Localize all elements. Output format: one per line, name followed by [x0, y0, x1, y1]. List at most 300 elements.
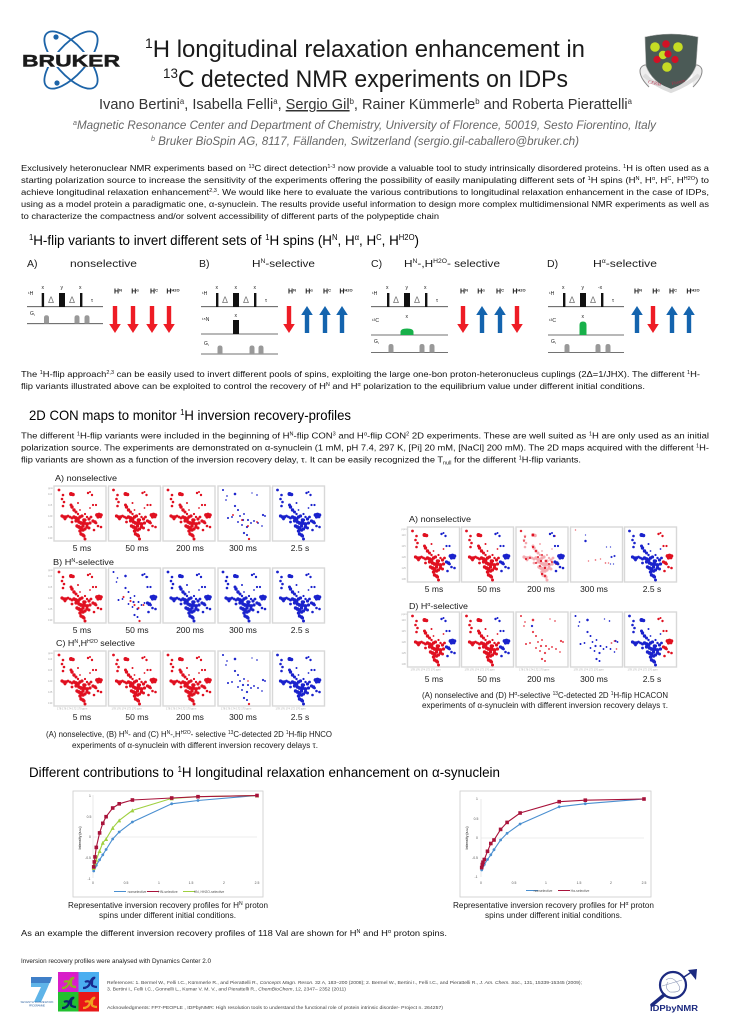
authors: , Isabella Felli — [184, 96, 273, 113]
caption: HCACON maps: (A) nonselective and (D) H — [422, 691, 516, 700]
panel: B HN-selective: H — [288, 288, 293, 296]
panel: C HN,HH2O-selective: H — [404, 258, 412, 270]
caption: HCACON maps: -selective — [517, 691, 553, 700]
heading: contributions: H longitudinal relaxation enhancement on α-synuclein — [182, 764, 500, 780]
panel: A nonselective — [27, 258, 180, 333]
row D Halpha-selective: 300 ms — [580, 674, 608, 684]
heading: 2D CON maps — [29, 407, 351, 423]
chart: Halpha recovery profiles: 1 — [545, 881, 547, 885]
panel: C HN,HH2O-selective — [371, 258, 526, 352]
heading: 1H-flip variants: H-flip variants to invert different sets of — [33, 232, 265, 248]
text block: 2D CON description: 1 — [519, 456, 522, 462]
caption: Halpha profiles: spins under different initial conditions. — [485, 911, 622, 920]
text block: introduction: 1-3 — [327, 164, 336, 170]
panel: D Halpha-selective: G — [551, 339, 555, 345]
text block: 2D CON description: 1 — [696, 444, 699, 450]
affiliations: Bruker BioSpin AG, 8117, Fällanden, Switzerland (sergio.gil-caballero@bruker.ch) — [155, 136, 579, 148]
text block: 1H-flip approach: can be easily used to invert different pools of spins, exploiting the large one-bon proton-heteronucleus cuplings (2Δ=1/JHX). The different — [114, 369, 687, 379]
panel: C HN,HH2O-selective: H — [512, 288, 517, 296]
panel: D Halpha-selective: D) — [547, 258, 558, 270]
row A nonselective: A) nonselective — [409, 514, 471, 524]
chart: Halpha recovery profiles: -0.5 — [472, 856, 478, 860]
text block: 118 Val example: As an example the different inversion recovery profiles of 118 Val are shown for H — [21, 928, 331, 938]
panel: D Halpha-selective: ¹³C — [549, 318, 556, 324]
panel: C HN,HH2O-selective: t — [378, 341, 379, 345]
panel: D Halpha-selective: α — [657, 288, 660, 292]
caption: HN profiles: Representative inversion recovery profiles for H — [68, 901, 237, 910]
authors: b — [475, 97, 480, 106]
panel: C HN,HH2O-selective: - selective — [447, 258, 500, 270]
authors: Sergio Gil — [286, 96, 350, 113]
row D Halpha-selective — [402, 601, 676, 684]
row C HN,HH2O selective: 50 ms — [125, 712, 149, 722]
panel: B HN-selective: H — [323, 288, 328, 296]
heading: 1H-flip variants: 1 — [29, 233, 34, 242]
text block: introduction: α — [652, 176, 655, 182]
chart: HN recovery profiles — [73, 791, 263, 897]
panel: A nonselective: H — [114, 288, 119, 296]
row B HN-selective: N — [71, 558, 76, 564]
caption: Halpha profiles: Representative inversion recovery profiles for H — [453, 901, 622, 910]
panel: D Halpha-selective: x — [582, 314, 584, 320]
panel: D Halpha-selective: α — [602, 259, 606, 265]
spectra group: HNCO maps — [46, 473, 332, 750]
panel: D Halpha-selective: -selective — [606, 258, 657, 270]
row B HN-selective: B) H — [53, 557, 70, 567]
caption: Halpha profiles: α — [626, 901, 629, 907]
chart: HN recovery profiles: -0.5 — [85, 856, 91, 860]
text block: 1H-flip approach: The — [21, 369, 36, 379]
panel: B HN-selective: H — [305, 288, 310, 296]
text block: introduction: H2O — [684, 176, 695, 182]
row A nonselective: A) nonselective — [55, 473, 117, 483]
text block: introduction: , H — [671, 175, 684, 185]
authors: a — [628, 97, 633, 106]
text block: 1H-flip approach: α — [358, 382, 361, 388]
row B HN-selective: 300 ms — [229, 625, 257, 635]
panel: B HN-selective: H2O — [344, 288, 353, 292]
row B HN-selective: -selective — [75, 557, 114, 567]
caption: HCACON maps: 13 — [553, 691, 558, 697]
row A nonselective: 2.5 s — [291, 543, 309, 553]
caption: HNCO maps: - selective — [191, 730, 228, 739]
text block: introduction: N — [636, 176, 640, 182]
row A nonselective: 300 ms — [580, 584, 608, 594]
panel: B HN-selective: -selective — [265, 258, 315, 270]
caption: HCACON maps: C-detected 2D — [558, 691, 611, 700]
text block: introduction: 13 — [248, 164, 255, 170]
text block: 1H-flip approach: 2,3 — [106, 370, 114, 376]
panel: A nonselective: nonselective — [70, 258, 137, 270]
panel: B HN-selective: α — [310, 288, 313, 292]
logo: Bruker — [21, 23, 121, 97]
heading: contributions: 1 — [178, 765, 182, 774]
text block: 1H-flip approach: H- — [690, 369, 700, 379]
heading: 1H-flip variants: 1 — [265, 233, 270, 242]
chart: Halpha recovery profiles: nonselective — [534, 889, 553, 893]
panel: B HN-selective: x — [234, 313, 238, 319]
authors: a — [180, 97, 185, 106]
text block: 1H-flip approach: and H — [330, 381, 358, 391]
caption: HCACON maps: α — [514, 691, 517, 697]
row A nonselective — [402, 514, 676, 594]
row B HN-selective — [48, 557, 324, 635]
chart: HN recovery profiles: HN, HH2O-selective — [194, 890, 224, 894]
caption: HNCO maps: H2O — [181, 730, 191, 736]
panel: C HN,HH2O-selective: α — [482, 288, 485, 292]
panel: D Halpha-selective: H — [652, 288, 657, 296]
row C HN,HH2O selective: N — [74, 639, 79, 645]
row A nonselective — [48, 473, 324, 553]
panel: C HN,HH2O-selective: C — [501, 288, 504, 292]
heading: 1H-flip variants: C — [376, 233, 382, 242]
chart: Halpha recovery profiles: 0.5 — [512, 881, 516, 885]
panel: C HN,HH2O-selective: H — [460, 288, 465, 296]
chart: HN recovery profiles: 1 — [89, 794, 91, 798]
authors: , Rainer Kümmerle — [354, 96, 475, 113]
heading: 1H-flip variants: , H — [338, 232, 355, 248]
caption: HN profiles: proton — [243, 901, 268, 910]
logo: Bruker: BRUKER — [22, 52, 120, 70]
logo: IDPbyNMR — [650, 969, 698, 1013]
caption: HNCO maps — [46, 730, 332, 750]
panel: A nonselective: τ — [91, 298, 93, 304]
chart: Halpha recovery profiles: -1 — [474, 875, 478, 879]
heading: 2D CON maps: H inversion recovery-profiles — [184, 407, 351, 423]
panel: B HN-selective: τ — [265, 298, 267, 304]
panel: B HN-selective: t — [208, 343, 209, 347]
references — [107, 980, 582, 992]
panel: D Halpha-selective: Δ — [590, 295, 596, 305]
row A nonselective: 5 ms — [425, 584, 443, 594]
text block: 2D CON description: -flip CON — [294, 430, 333, 440]
text block: introduction: . We would like here to evaluate the various contributions to longitudinal relaxation enhancement in the case of IDPs, — [217, 187, 709, 197]
text block: introduction: H spins (H — [591, 175, 636, 185]
panel: D Halpha-selective — [547, 258, 700, 352]
text block: 2D CON description: and H — [336, 430, 364, 440]
panel: B HN-selective: x — [254, 285, 256, 291]
caption: HN profiles: spins under different initial conditions. — [99, 911, 236, 920]
logo: CERM crest: Firenze — [671, 78, 686, 86]
panel: D Halpha-selective: H2O — [691, 288, 700, 292]
text block: 2D CON description: flip variants are shown as a function of the inversion recovery delay, τ. It can be easily recognized the T — [21, 454, 412, 464]
panel: D Halpha-selective: Δ — [569, 295, 575, 305]
caption: HNCO maps: N — [125, 730, 128, 736]
chart: HN recovery profiles: 1 — [158, 881, 160, 885]
text block: 1H-flip approach — [21, 369, 700, 391]
heading: 2D CON maps: 2D CON maps to monitor — [29, 407, 186, 423]
panel: B HN-selective: Δ — [243, 295, 249, 305]
text block: introduction: , H — [640, 175, 652, 185]
panel: A nonselective: H — [166, 288, 171, 296]
panel: A nonselective: α — [136, 288, 139, 292]
panel: C HN,HH2O-selective: Δ — [393, 295, 399, 305]
row B HN-selective: 2.5 s — [291, 625, 309, 635]
panel: B HN-selective — [199, 258, 353, 354]
logo: FP7 — [20, 977, 54, 1008]
spectra group: HCACON maps — [402, 514, 676, 710]
chart: Halpha recovery profiles: Hα-selective — [571, 889, 589, 893]
note: Dynamics Center: Inversion recovery profiles were analysed with Dynamics Center 2.0 — [21, 958, 211, 965]
panel: D Halpha-selective: t — [555, 341, 556, 345]
panel: B HN-selective: Δ — [222, 295, 228, 305]
authors: , — [278, 96, 286, 113]
caption: Halpha profiles — [453, 901, 654, 920]
panel: A nonselective: A) — [27, 258, 38, 270]
caption: HNCO maps: - and (C) H — [128, 730, 167, 739]
chart: Halpha recovery profiles — [460, 791, 651, 897]
logo: FP7: SEVENTH FRAMEWORK — [20, 1000, 54, 1004]
row D Halpha-selective: 2.5 s — [643, 674, 661, 684]
caption: HCACON maps: H-flip HCACON — [614, 691, 668, 700]
panel: C HN,HH2O-selective: H2O — [517, 288, 526, 292]
caption: HN profiles: N — [239, 901, 243, 907]
chart: HN recovery profiles: 2.5 — [255, 881, 259, 885]
panel: C HN,HH2O-selective: N — [413, 259, 417, 265]
panel: D Halpha-selective: H — [669, 288, 674, 296]
text block: 118 Val example: N — [357, 929, 361, 935]
chart: Halpha recovery profiles: 1.5 — [577, 881, 581, 885]
text block: introduction: achieve longitudinal relaxation enhancement — [21, 187, 191, 197]
row B HN-selective: 200 ms — [176, 625, 204, 635]
affiliations: b — [151, 136, 155, 143]
text block: introduction: Exclusively heteronuclear NMR experiments based on — [21, 163, 227, 173]
panel: B HN-selective: ¹⁵N — [202, 317, 210, 323]
references: References: 1. Bermel W., Felli I.C., Kümmerle R., and Pierattelli R., Concepts Magn. Reson. 32 A, 183–200 (2008); 2. Bermel W., Bertini I., Felli I.C., and Pierattelli R., J. Am. Chem. Soc. , 131, 15339-15345 (2009); — [107, 980, 582, 986]
chart: HN recovery profiles: 0 — [92, 881, 94, 885]
text block: introduction: starting polarization source to increase the sensitivity of the experiments offering the possibility of easily manipulating different sets of — [21, 175, 526, 185]
panel: B HN-selective: N — [260, 259, 265, 265]
panel: C HN,HH2O-selective: x — [406, 314, 408, 320]
logo: FP7: PROGRAMME — [29, 1004, 45, 1008]
panel: A nonselective: H — [150, 288, 155, 296]
caption: HNCO maps: N — [167, 730, 171, 736]
row C HN,HH2O selective: 200 ms — [176, 712, 204, 722]
heading: 1H-flip variants: H spins (H — [269, 232, 332, 248]
text block: introduction: 1 — [623, 164, 626, 170]
panel: C HN,HH2O-selective: Δ — [414, 295, 420, 305]
caption: HNCO maps: 13 — [228, 730, 234, 736]
heading: 1H-flip variants: α — [355, 233, 359, 242]
chart: HN recovery profiles: 1.5 — [189, 881, 193, 885]
panel: A nonselective: H — [131, 288, 136, 296]
panel: D Halpha-selective: τ — [612, 298, 614, 304]
title: C detected NMR experiments on IDPs — [178, 66, 568, 93]
row B HN-selective: 50 ms — [125, 625, 149, 635]
text block: 2D CON description: H-flip variants were included in the beginning of H — [80, 430, 290, 440]
heading: 1H-flip variants — [29, 232, 419, 248]
authors: a — [273, 97, 278, 106]
title: 13 — [163, 65, 178, 81]
row D Halpha-selective: 200 ms — [527, 674, 555, 684]
caption: HNCO maps: (A) nonselective, (B) H — [46, 730, 126, 739]
panel: C HN,HH2O-selective: -,H — [417, 258, 433, 270]
text block: 2D CON description: polarization source. The experiments are demonstrated on α-synuclein (1 mM, pH 7.4, 297 K, [Pi] 20 mM, [NaCl] 200 mM). The 2D maps acquired with the different — [21, 442, 641, 452]
row C HN,HH2O selective: ,H — [78, 638, 87, 648]
heading: 1H-flip variants: N — [332, 233, 338, 242]
text block: 118 Val example: proton spins. — [391, 928, 447, 938]
panel: B HN-selective: H — [339, 288, 344, 296]
row B HN-selective: 5 ms — [73, 625, 91, 635]
text block: 2D CON description: null — [443, 460, 451, 466]
panel: A nonselective: Δ — [69, 295, 75, 305]
title: 1 — [145, 35, 153, 51]
text block: introduction: 2,3 — [209, 188, 217, 194]
panel: D Halpha-selective: y — [582, 285, 584, 291]
text block: 2D CON description: 1 — [589, 432, 592, 438]
text block: 2D CON description: 3 — [333, 432, 336, 438]
panel: B HN-selective: G — [204, 341, 208, 347]
chart: HN recovery profiles: 0 — [89, 835, 91, 839]
text block: introduction: now provide a valuable tool to study intrinsically disordered proteins. — [335, 163, 623, 173]
panel: B HN-selective: H — [252, 258, 260, 270]
panel: B HN-selective: ¹H — [202, 291, 208, 297]
chart: HN recovery profiles: HN-selective — [158, 890, 178, 894]
heading: contributions: Different contributions to — [29, 764, 180, 780]
text block: introduction: , H — [655, 175, 667, 185]
row C HN,HH2O selective: C) H — [56, 638, 73, 648]
panel: A nonselective: Δ — [48, 295, 54, 305]
row D Halpha-selective: 5 ms — [425, 674, 443, 684]
heading: 2D CON maps: 1 — [180, 408, 185, 417]
text block: introduction: using as a model protein a paradigmatic one, α-synuclein. The results provide useful information to design more complex multidimensional NMR experiments as well as — [21, 199, 709, 209]
row D Halpha-selective: D) H — [409, 601, 426, 611]
panel: D Halpha-selective: x — [562, 285, 565, 291]
row A nonselective: 300 ms — [229, 543, 257, 553]
text block: 2D CON description: α — [364, 432, 367, 438]
row D Halpha-selective: α — [427, 602, 430, 608]
row C HN,HH2O selective: selective — [98, 638, 135, 648]
row D Halpha-selective: 50 ms — [477, 674, 501, 684]
heading: 1H-flip variants: , H — [359, 232, 376, 248]
text block: introduction: to characterize the compactness and/or solvent accessibility of different parts of the polypeptide chain — [21, 211, 439, 221]
row A nonselective: 50 ms — [125, 543, 149, 553]
text block: introduction: C — [667, 176, 672, 182]
chart: Halpha recovery profiles: 0 — [480, 881, 482, 885]
caption: Halpha profiles: proton — [628, 901, 654, 910]
heading: 1H-flip variants: ) — [415, 232, 419, 248]
text block: 1H-flip approach: flip variants illustrated above can be exploited to control the recovery of H — [21, 381, 300, 391]
caption: HCACON maps — [422, 691, 668, 710]
panel: B HN-selective: C — [328, 288, 331, 292]
authors — [99, 96, 633, 113]
panel: B HN-selective: x — [216, 285, 218, 291]
panel: D Halpha-selective: H — [593, 258, 601, 270]
panel: A nonselective: N — [119, 288, 122, 292]
title — [145, 35, 585, 93]
text block: 118 Val example: α — [388, 929, 391, 935]
row A nonselective: 50 ms — [477, 584, 501, 594]
panel: A nonselective: H2O — [171, 288, 180, 292]
text block: introduction: H is often used as a — [626, 163, 709, 173]
panel: D Halpha-selective: H — [634, 288, 639, 296]
authors: and Roberta Pierattelli — [480, 96, 628, 113]
chart: Halpha recovery profiles: 1 — [476, 797, 478, 801]
text block: introduction: C direct detection — [255, 163, 328, 173]
row A nonselective: 200 ms — [527, 584, 555, 594]
row A nonselective: 5 ms — [73, 543, 91, 553]
text block: 1H-flip approach: 1 — [40, 370, 43, 376]
chart: HN recovery profiles: 2 — [223, 881, 225, 885]
affiliations: a — [73, 120, 77, 127]
text block: 2D CON description: N — [290, 432, 294, 438]
chart: HN recovery profiles: 0.5 — [124, 881, 128, 885]
chart: Halpha recovery profiles: 0 — [476, 836, 478, 840]
panel: B HN-selective: N — [293, 288, 296, 292]
chart: HN recovery profiles: -1 — [87, 877, 91, 881]
text block: 2D CON description — [21, 430, 709, 466]
references: 3. Bertini I., Felli I.C., Gonnelli L., Kumar V. M. V., and Pierattelli R., ChemBioChem , 12, 2347– 2352 (2011) — [107, 986, 346, 992]
row C HN,HH2O selective: 300 ms — [229, 712, 257, 722]
text block: introduction: ) to — [695, 175, 709, 185]
panel: A nonselective: x — [42, 285, 44, 291]
text block: 2D CON description: 2 — [406, 432, 410, 438]
panel: B HN-selective: x — [234, 285, 238, 291]
panel: C HN,HH2O-selective: H — [477, 288, 482, 296]
caption: HCACON maps: experiments of α-synuclein with different inversion recovery delays τ. — [422, 701, 668, 710]
logo: CERM crest — [640, 34, 702, 91]
chart: HN recovery profiles: Intensity (a.u.) — [78, 827, 82, 849]
row A nonselective: 200 ms — [176, 543, 204, 553]
text block: 2D CON description: H- — [699, 442, 709, 452]
caption: HNCO maps: experiments of α-synuclein with different inversion recovery delays τ. — [72, 741, 318, 750]
heading: contributions — [29, 764, 500, 780]
panel: C HN,HH2O-selective: H2O — [433, 259, 447, 265]
chart: Halpha recovery profiles: Intensity (a.u.) — [465, 827, 469, 849]
text block: 2D CON description: -flip CON — [367, 430, 406, 440]
panel: D Halpha-selective: N — [639, 288, 642, 292]
text block: 118 Val example: and H — [360, 928, 388, 938]
chart: Halpha recovery profiles: 2 — [610, 881, 612, 885]
panel: A nonselective: t — [34, 313, 35, 317]
text block: 2D CON description: 2D experiments. These are well suited as — [409, 430, 589, 440]
chart: HN recovery profiles: nonselective — [128, 890, 147, 894]
panel: A nonselective: x — [79, 285, 82, 291]
title: H longitudinal relaxation enhancement in — [153, 36, 585, 63]
text block: 2D CON description: 1 — [77, 432, 80, 438]
panel: C HN,HH2O-selective: H — [496, 288, 501, 296]
text block: 1H-flip approach: N — [326, 382, 330, 388]
panel: A nonselective: G — [30, 311, 34, 317]
acknowledgments: Acknowledgments: FP7-PEOPLE , IDPbyNMR: High resolution tools to understand the functional role of protein intrinsic disorder- Project n. 264257) — [107, 1005, 443, 1011]
panel: D Halpha-selective: ¹H — [549, 291, 555, 297]
caption: HNCO maps: 1 — [286, 730, 289, 736]
panel: C HN,HH2O-selective: G — [374, 339, 378, 345]
affiliations: Magnetic Resonance Center and Department of Chemistry, University of Florence, 50019, Sesto Fiorentino, Italy — [77, 120, 657, 132]
text block: 2D CON description: The different — [21, 430, 69, 440]
logo: CERM crest: CERM — [648, 79, 662, 87]
caption: HNCO maps: C-detected 2D — [233, 730, 286, 739]
panel: D Halpha-selective: H — [686, 288, 691, 296]
chart: Halpha recovery profiles: 2.5 — [642, 881, 646, 885]
authors: b — [350, 97, 354, 106]
panel: C HN,HH2O-selective: x — [386, 285, 389, 291]
row C HN,HH2O selective — [48, 638, 324, 722]
text block: 2D CON description: H-flip variants. — [522, 454, 581, 464]
caption: HNCO maps: -,H — [170, 730, 181, 739]
text block: 2D CON description: for the different — [451, 454, 519, 464]
caption: HN profiles — [68, 901, 268, 920]
chart: Halpha recovery profiles: 0.5 — [474, 817, 478, 821]
panel: A nonselective: C — [155, 288, 158, 292]
text block: 2D CON description: H are only used as an initial — [592, 430, 709, 440]
heading: 1H-flip variants: , H — [382, 232, 399, 248]
row C HN,HH2O selective: 5 ms — [73, 712, 91, 722]
panel: C HN,HH2O-selective: y — [406, 285, 408, 291]
logo: four-colour squares — [58, 972, 99, 1012]
authors: Ivano Bertini — [99, 96, 182, 113]
text block: introduction — [21, 163, 709, 221]
